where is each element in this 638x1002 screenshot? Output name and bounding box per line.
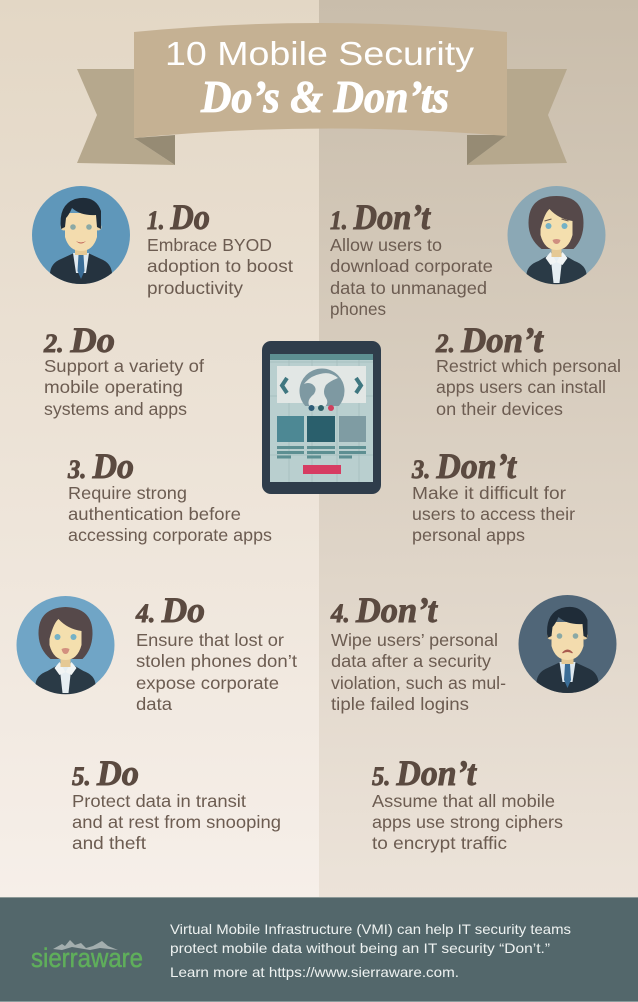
item: 2. Do: mobile operating: [44, 377, 183, 397]
item: 5. Don't: 5. Don’t: [372, 753, 477, 793]
background: left panel: [0, 0, 319, 898]
item: 1. Don't: 1. Don’t: [330, 197, 431, 237]
item: 1. Do: 1. Do: [147, 197, 210, 237]
item: 4. Do: data: [136, 694, 172, 714]
item: 1. Don't: download corporate: [330, 256, 493, 276]
item: 3. Do: accessing corporate apps: [68, 525, 272, 545]
item: 3. Do: 3. Do: [67, 446, 134, 486]
item: 2. Don't: apps users can install: [436, 377, 606, 397]
item: 1. Do: [147, 197, 293, 298]
background: right panel: [319, 0, 638, 898]
item: 2. Don't: 2. Don’t: [435, 320, 544, 360]
item: 3. Don't: Make it difficult for: [412, 483, 566, 503]
ribbon left tail: [77, 69, 175, 165]
item: 5. Don't: [372, 753, 563, 853]
item: 1. Don't: Allow users to: [330, 235, 442, 255]
item: 4. Do: Ensure that lost or: [136, 630, 284, 650]
item: 3. Don't: personal apps: [412, 525, 525, 545]
footer text: Virtual Mobile Infrastructure (VMI) can help IT security teams: [170, 921, 571, 937]
item: 4. Do: 4. Do: [135, 590, 205, 630]
item: 1. Do: productivity: [147, 278, 243, 298]
item: 5. Do: and at rest from snooping: [72, 812, 281, 832]
title ribbon: [77, 23, 567, 165]
item: 4. Don't: violation, such as mul-: [331, 673, 506, 693]
ribbon main band: [134, 23, 507, 138]
item: 1. Do: Embrace BYOD: [147, 235, 272, 255]
item: 5. Don't: Assume that all mobile: [372, 791, 555, 811]
icon: tablet: [262, 341, 381, 494]
item: 2. Do: [43, 320, 204, 419]
item: 4. Do: expose corporate: [136, 673, 279, 693]
item: 3. Don't: 3. Don’t: [411, 446, 517, 486]
footer text: [170, 921, 571, 980]
footer bar: [0, 897, 638, 1002]
item: 5. Don't: to encrypt traffic: [372, 833, 507, 853]
item: 4. Do: [135, 590, 297, 714]
ribbon right tail: [467, 69, 567, 165]
item: 2. Don't: Restrict which personal: [436, 356, 621, 376]
item: 2. Don't: [435, 320, 621, 419]
footer text: protect mobile data without being an IT security “Don’t.”: [170, 940, 550, 956]
avatar: smiling man, item 1: [32, 186, 130, 284]
ribbon right fold: [467, 135, 507, 165]
item: 4. Don't: tiple failed logins: [331, 694, 469, 714]
item: 1. Do: adoption to boost: [147, 256, 293, 276]
title line 1: 10 Mobile Security: [165, 36, 474, 73]
item: 4. Don't: Wipe users’ personal: [331, 630, 498, 650]
avatar: smiling woman, item 4: [16, 596, 114, 694]
item: 1. Don't: [330, 197, 493, 319]
logo: sierraware: sierraware: [31, 943, 143, 973]
item: 1. Don't: data to unmanaged: [330, 278, 487, 298]
item: 3. Do: [67, 446, 272, 545]
item: 5. Do: Protect data in transit: [72, 791, 246, 811]
item: 4. Don't: [330, 590, 506, 714]
ribbon left fold: [134, 135, 175, 165]
item: 5. Do: [72, 753, 281, 853]
item: 3. Don't: [411, 446, 575, 545]
footer text: Learn more at https://www.sierraware.com.: [170, 964, 459, 980]
item: 2. Do: Support a variety of: [44, 356, 204, 376]
title line 2: Do’s & Don’ts: [200, 71, 449, 122]
item: 4. Don't: data after a security: [331, 651, 491, 671]
item: 2. Don't: on their devices: [436, 399, 563, 419]
item: 3. Do: authentication before: [68, 504, 241, 524]
item: 3. Don't: users to access their: [412, 504, 575, 524]
item: 2. Do: systems and apps: [44, 399, 187, 419]
item: 4. Do: stolen phones don’t: [136, 651, 297, 671]
item: 1. Don't: phones: [330, 299, 386, 319]
item: 5. Don't: apps use strong ciphers: [372, 812, 563, 832]
avatar: sad man, item 4: [518, 595, 616, 693]
item: 5. Do: and theft: [72, 833, 146, 853]
item: 5. Do: 5. Do: [72, 753, 139, 793]
avatar: worried woman, item 1: [508, 186, 606, 284]
item: 4. Don't: 4. Don’t: [330, 590, 438, 630]
item: 3. Do: Require strong: [68, 483, 187, 503]
item: 2. Do: 2. Do: [43, 320, 115, 360]
